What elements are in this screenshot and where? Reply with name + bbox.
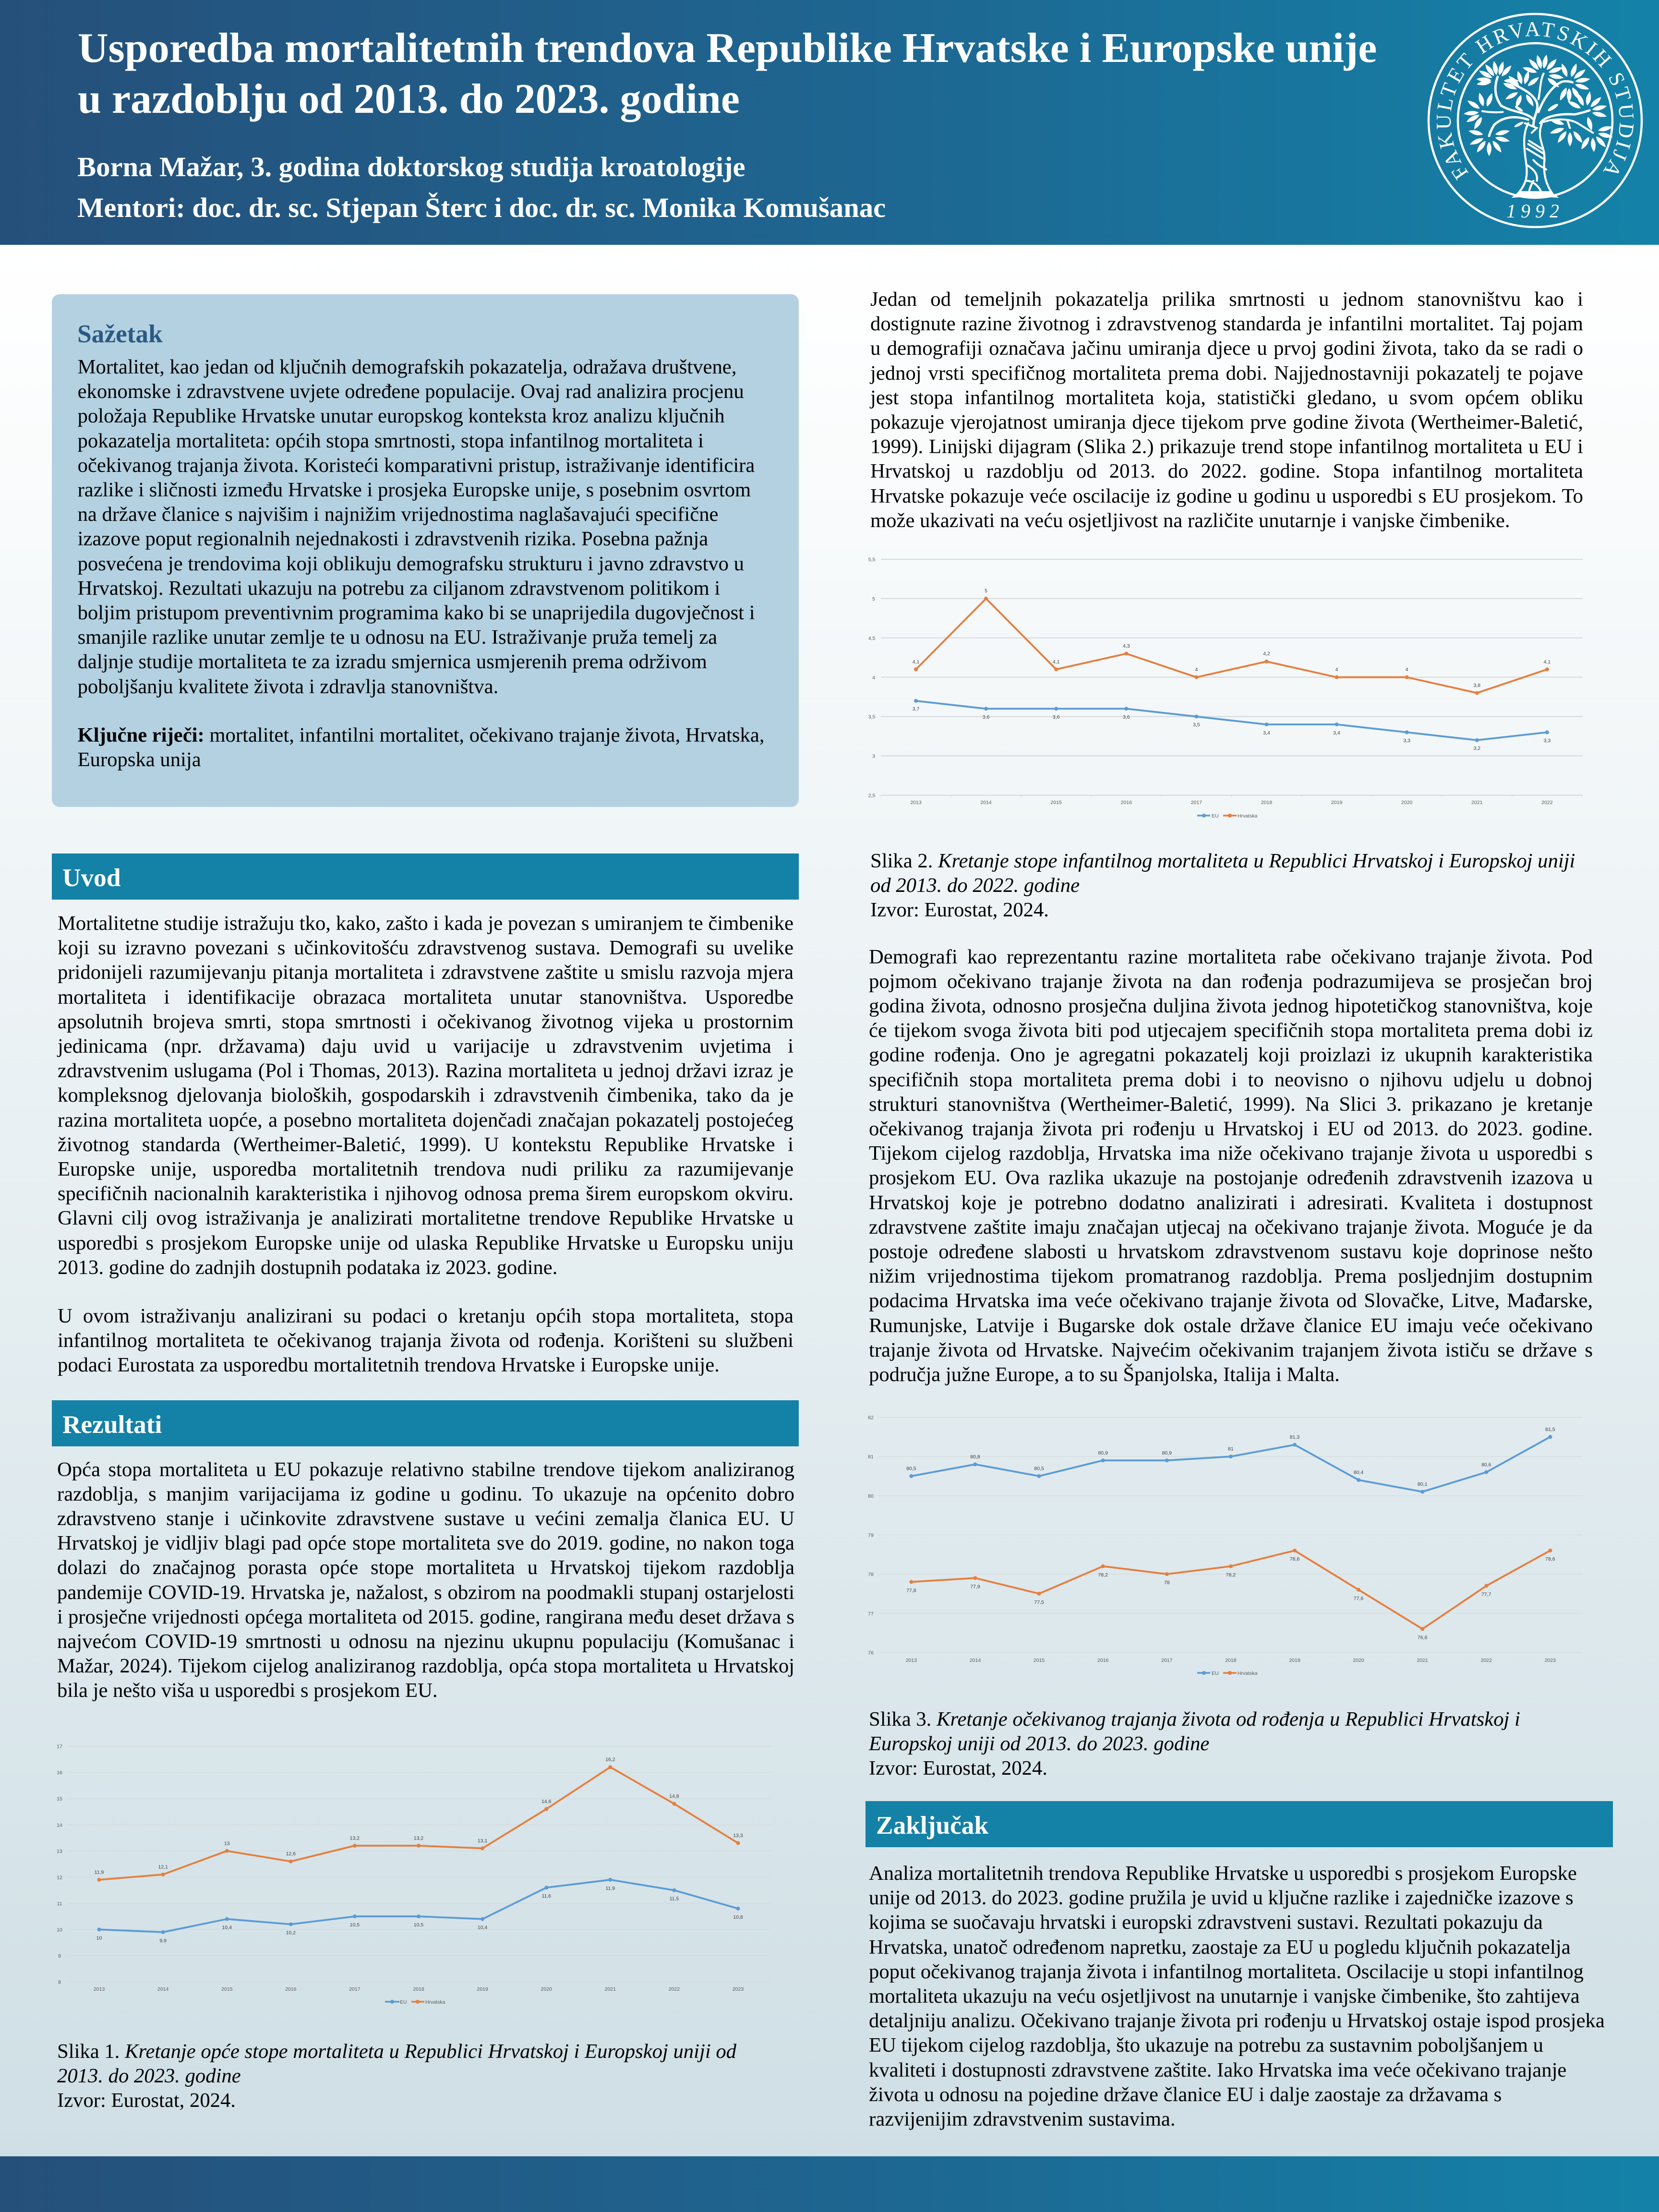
text: results: pandemije COVID-19. Hrvatska je, nažalost, s obzirom na poodmakli stupanj ostarjelosti xyxy=(57,1581,794,1604)
series: Hrvatska: 3,8 xyxy=(1473,683,1480,688)
series: EU: 3,4 xyxy=(1263,730,1270,736)
series: EU: 3,7 xyxy=(913,706,919,712)
series: Hrvatska: 78 xyxy=(1164,1580,1170,1586)
caption: Slika 1: Izvor: Eurostat, 2024. xyxy=(57,2089,236,2112)
series: Hrvatska: 76,6 xyxy=(1418,1635,1428,1640)
text: infant mortality: može ukazivati na veću osjetljivost na različite unutarnje i vanjske čimbenike. xyxy=(870,509,1510,532)
line chart: Slika 1, general mortality rate: 2016 xyxy=(285,1986,297,1992)
series: EU: 81 xyxy=(1228,1446,1234,1452)
line chart: Slika 1, general mortality rate xyxy=(57,1744,770,2005)
series: Hrvatska: 77,6 xyxy=(1354,1596,1363,1601)
line chart: Slika 1, general mortality rate: 15 xyxy=(57,1796,62,1802)
line chart: Slika 1, general mortality rate: 2022 xyxy=(669,1986,680,1992)
abstract text: izazove poput regionalnih nejednakosti i zdravstvenih rizika. Posebna pažnja xyxy=(78,528,708,550)
series: Hrvatska: 78,2 xyxy=(1098,1572,1108,1578)
author and mentors: Mentori: doc. dr. sc. Stjepan Šterc i doc. dr. sc. Monika Komušanac xyxy=(77,192,886,223)
series: EU: 80,5 xyxy=(1034,1466,1044,1472)
text: infant mortality: Jedan od temeljnih pokazatelja prilika smrtnosti u jednom stanovništvu kao i xyxy=(870,288,1583,311)
abstract text: smanjile razlike unutar zemlje te u odnosu na EU. Istraživanje pruža temelj za xyxy=(78,626,717,649)
series: EU: 3,3 xyxy=(1544,738,1551,744)
series: Hrvatska: 77,8 xyxy=(906,1587,916,1593)
legend: Hrvatska xyxy=(1238,1671,1258,1676)
text: life expectancy: pojmom očekivano trajanje života na dan rođenja podrazumijeva se prosječan broj xyxy=(869,970,1593,993)
text: results: i prosječne vrijednosti općega mortaliteta od 2015. godine, rangirana među deset država s xyxy=(57,1606,794,1628)
series: EU: 80,4 xyxy=(1354,1470,1363,1476)
text: introduction paragraph 1: 2013. godine do zadnjih dostupnih podataka iz 2023. godine. xyxy=(58,1256,557,1279)
legend xyxy=(385,1999,445,2005)
text: introduction paragraph 1: Glavni cilj ovog istraživanja je analizirati mortalitetne trendove Republike Hrvatske u xyxy=(58,1207,793,1229)
text: conclusion: Hrvatska, unatoč određenom napretku, zaostaje za EU u pogledu ključnih pokazatelja xyxy=(869,1936,1571,1959)
line chart: Slika 2, infant mortality rate: 2018 xyxy=(1261,800,1272,805)
text: life expectancy: očekivanog trajanja života pri rođenju u Hrvatskoj i EU od 2013. do 2023. godine. xyxy=(869,1118,1593,1140)
line chart: Slika 2, infant mortality rate: 2019 xyxy=(1331,800,1342,805)
series: Hrvatska: 4 xyxy=(1195,667,1198,673)
line chart: Slika 1, general mortality rate: 2020 xyxy=(541,1986,552,1992)
abstract text: poboljšanju kvalitete života i zdravlja stanovništva. xyxy=(78,675,498,698)
series: Hrvatska: 14,6 xyxy=(541,1799,552,1804)
line chart: Slika 2, infant mortality rate: 4 xyxy=(872,675,875,681)
caption: Slika 3: Slika 3. Kretanje očekivanog trajanja života od rođenja u Republici Hrvatskoj i xyxy=(869,1708,1520,1731)
line chart: Slika 3, life expectancy: 2016 xyxy=(1097,1658,1109,1663)
caption: Slika 1: Slika 1. Kretanje opće stope mortaliteta u Republici Hrvatskoj i Europskoj uniji od xyxy=(57,2040,736,2063)
series: Hrvatska: 77,9 xyxy=(970,1584,980,1589)
series: Hrvatska xyxy=(913,588,1551,695)
series: EU: 3,5 xyxy=(1193,722,1200,728)
text: life expectancy: prosjekom EU. Ova razlika ukazuje na postojanje određenih zdravstvenih izazova u xyxy=(869,1166,1593,1189)
text: infant mortality: Hrvatskoj u razdoblju od 2013. do 2022. godine. Stopa infantilnog mortaliteta xyxy=(870,460,1583,482)
series: Hrvatska: 4,1 xyxy=(1544,659,1551,665)
series: EU: 80,8 xyxy=(970,1454,980,1460)
series: EU: 80,9 xyxy=(1162,1450,1172,1456)
text: introduction paragraph 1: Mortalitetne studije istražuju tko, kako, zašto i kada je povezan s umiranjem te čimbenike xyxy=(58,912,793,935)
icon: faculty seal with olive tree: FAKULTET HRVATSKIH STUDIJA xyxy=(1437,22,1634,180)
text: conclusion: detaljniju analizu. Očekivano trajanje života pri rođenju u Hrvatskoj ostaje ispod prosjeka xyxy=(869,2009,1605,2032)
series: EU: 3,6 xyxy=(1123,714,1130,720)
legend: EU xyxy=(1212,1671,1219,1676)
series: EU: 9,9 xyxy=(159,1938,167,1944)
line chart: Slika 2, infant mortality rate: 2020 xyxy=(1401,800,1413,805)
text: conclusion: kojima se suočavaju hrvatski i europski zdravstveni sustavi. Rezultati pokazuju da xyxy=(869,1911,1543,1934)
title xyxy=(78,25,1377,122)
series: Hrvatska: 4,1 xyxy=(1053,659,1060,665)
text: introduction paragraph 1: specifičnih nacionalnih karakteristika i njihovog odnosa prema širem europskom okviru. xyxy=(58,1182,793,1205)
series: EU xyxy=(913,699,1551,751)
line chart: Slika 3, life expectancy: 2019 xyxy=(1289,1658,1300,1663)
line chart: Slika 2, infant mortality rate: 2014 xyxy=(980,800,992,805)
caption: Slika 2: Slika 2. Kretanje stope infantilnog mortaliteta u Republici Hrvatskoj i Europskoj uniji xyxy=(870,850,1575,872)
caption: Slika 2 xyxy=(870,850,1575,921)
text: conclusion: poput očekivanog trajanja života i infantilnog mortaliteta. Oscilacije u stopi infantilnog xyxy=(869,1960,1584,1983)
text: life expectancy: godina života, odnosno prosječna duljina života jednog hipotetičkog stanovništva, koje xyxy=(869,995,1593,1017)
keywords xyxy=(78,724,764,771)
legend: Hrvatska xyxy=(1238,813,1258,819)
abstract text: očekivanog trajanja života. Koristeći komparativni pristup, istraživanje identificira xyxy=(78,454,755,477)
text: life expectancy: specifičnih stopa mortaliteta prema dobi i to neovisno o njihovu udjelu u dobnoj xyxy=(869,1069,1593,1091)
series: Hrvatska: 12,1 xyxy=(158,1864,168,1870)
author and mentors: Borna Mažar, 3. godina doktorskog studija kroatologije xyxy=(77,151,745,182)
text: conclusion: unije od 2013. do 2023. godine pružila je uvid u ključne razlike i zajedničke izazove s xyxy=(869,1887,1574,1909)
legend: EU xyxy=(400,1999,407,2005)
text: life expectancy xyxy=(869,946,1593,1386)
text: introduction paragraph 2 xyxy=(58,1305,793,1376)
series: EU: 80,6 xyxy=(1481,1462,1491,1467)
series: EU: 10,8 xyxy=(733,1914,743,1920)
series: EU: 10,4 xyxy=(478,1925,487,1931)
heading band: Uvod xyxy=(52,854,799,900)
line chart: Slika 3, life expectancy: 2015 xyxy=(1034,1658,1045,1663)
text: introduction paragraph 1: apsolutnih brojeva smrti, stopa smrtnosti i očekivanog životnog vijeka u prostornim xyxy=(58,1010,793,1033)
text: life expectancy: postoje određene slabosti u hrvatskom zdravstvenom sustavu koje doprinose nešto xyxy=(869,1240,1593,1263)
text: life expectancy: trajanje života od Hrvatske. Najvećim očekivanim trajanjem života ističu se države s xyxy=(869,1339,1593,1361)
series: Hrvatska: 77,5 xyxy=(1034,1599,1044,1605)
series: EU xyxy=(906,1427,1555,1494)
line chart: Slika 1, general mortality rate: 2014 xyxy=(157,1986,168,1992)
text: life expectancy: će tijekom svoga života biti pod utjecajem specifičnih stopa mortaliteta prema dobi iz xyxy=(869,1019,1593,1042)
series: Hrvatska: 11,9 xyxy=(95,1869,104,1875)
text: infant mortality: dostignute razine životnog i zdravstvenog standarda je infantilni mortalitet. Taj pojam xyxy=(870,313,1583,335)
text: conclusion: mortaliteta ukazuju na veću osjetljivost na unutarnje i vanjske čimbenike, što zahtijeva xyxy=(869,1985,1580,2008)
abstract text xyxy=(78,356,755,698)
series: Hrvatska: 12,6 xyxy=(286,1851,296,1857)
line chart: Slika 1, general mortality rate: 2013 xyxy=(94,1986,105,1992)
caption: Slika 3: Europskoj uniji od 2013. do 2023. godine xyxy=(869,1732,1209,1755)
text: infant mortality: jednoj vrsti specifičnog mortaliteta prema dobi. Najjednostavniji pokazatelj te pojave xyxy=(870,362,1583,385)
text: introduction paragraph 2: U ovom istraživanju analizirani su podaci o kretanju općih stopa mortaliteta, stopa xyxy=(58,1305,793,1327)
series: Hrvatska: 4,2 xyxy=(1263,651,1270,657)
line chart: Slika 3, life expectancy: 81 xyxy=(868,1454,874,1460)
series: EU: 80,5 xyxy=(906,1466,916,1472)
text: introduction paragraph 1: pridonijeli razumijevanju pitanja mortaliteta i zdravstvene zaštite u smislu razvoja mjera xyxy=(58,961,793,984)
line chart: Slika 1, general mortality rate: 2017 xyxy=(349,1986,361,1992)
line chart: Slika 2, infant mortality rate: 2021 xyxy=(1471,800,1483,805)
series: Hrvatska xyxy=(95,1757,743,1882)
series: Hrvatska: 78,6 xyxy=(1545,1556,1555,1562)
series: EU: 11,5 xyxy=(670,1896,679,1902)
series: Hrvatska: 13,2 xyxy=(350,1835,360,1841)
line chart: Slika 2, infant mortality rate: 2016 xyxy=(1121,800,1132,805)
line chart: Slika 2, infant mortality rate xyxy=(868,557,1583,819)
line chart: Slika 2, infant mortality rate: 3 xyxy=(872,754,875,759)
text: conclusion: života u odnosu na pojedine države članice EU i dalje zaostaje za državama s xyxy=(869,2083,1502,2106)
series: Hrvatska: 78,2 xyxy=(1226,1572,1236,1578)
line chart: Slika 1, general mortality rate: 11 xyxy=(57,1901,62,1907)
line chart: Slika 3, life expectancy: 2022 xyxy=(1481,1658,1492,1663)
line chart: Slika 3, life expectancy: 2018 xyxy=(1225,1658,1237,1663)
line chart: Slika 3, life expectancy: 2014 xyxy=(970,1658,981,1663)
text: introduction paragraph 2: podaci Eurostata za usporedbu mortalitetnih trendova Hrvatske i Europske unije. xyxy=(58,1354,720,1376)
series: EU: 11,6 xyxy=(541,1893,551,1899)
line chart: Slika 3, life expectancy: 80 xyxy=(868,1493,874,1499)
abstract text: ekonomske i zdravstvene uvjete određene populacije. Ovaj rad analizira procjenu xyxy=(78,380,744,403)
series: Hrvatska: 4,3 xyxy=(1123,643,1130,649)
keywords: Ključne riječi: mortalitet, infantilni mortalitet, očekivano trajanje života, Hrvatska, xyxy=(78,724,764,746)
line chart: Slika 1, general mortality rate: 14 xyxy=(57,1822,62,1828)
line chart: Slika 3, life expectancy: 77 xyxy=(868,1611,874,1617)
text: introduction paragraph 1: mortaliteta i identifikacije obrazaca mortaliteta unutar stanovništva. Usporedbe xyxy=(58,986,793,1009)
series: Hrvatska: 5 xyxy=(985,588,987,594)
title: Usporedba mortalitetnih trendova Republike Hrvatske i Europske unije xyxy=(78,25,1377,72)
text: conclusion: razvijenijim zdravstvenim sustavima. xyxy=(869,2108,1175,2130)
heading band: Rezultati: Rezultati xyxy=(62,1410,162,1439)
series: Hrvatska: 13 xyxy=(224,1840,230,1846)
series: EU: 81,3 xyxy=(1290,1434,1299,1440)
text: results: razdoblja, s manjim varijacijama iz godine u godinu. To ukazuje na općenito dobro xyxy=(57,1483,794,1505)
series: EU: 10,5 xyxy=(350,1922,360,1928)
text: results: Mažar, 2024). Tijekom cijelog analiziranog razdoblja, opća stopa mortaliteta u Hrvatskoj xyxy=(57,1655,794,1677)
line chart: Slika 2, infant mortality rate: 5,5 xyxy=(868,557,875,563)
caption: Slika 1: 2013. do 2023. godine xyxy=(57,2065,241,2087)
text: introduction paragraph 1: usporedbi s prosjekom Europske unije od ulaska Republike Hrvatske u Europsku uniju xyxy=(58,1232,793,1254)
line chart: Slika 3, life expectancy: 2023 xyxy=(1545,1658,1556,1663)
series: EU: 10,5 xyxy=(414,1922,423,1928)
series: Hrvatska: 14,8 xyxy=(669,1793,679,1799)
series: EU: 3,4 xyxy=(1333,730,1340,736)
heading band: Zaključak: Zaključak xyxy=(876,1811,988,1839)
text: conclusion: Analiza mortalitetnih trendova Republike Hrvatske u usporedbi s prosjekom Europske xyxy=(869,1862,1577,1885)
legend xyxy=(1197,1671,1258,1676)
legend xyxy=(1197,813,1258,819)
series: Hrvatska: 13,1 xyxy=(478,1838,487,1844)
text: life expectancy: Demografi kao reprezentantu razine mortaliteta rabe očekivano trajanje života. Pod xyxy=(869,946,1593,968)
series: EU: 10,4 xyxy=(222,1925,232,1931)
heading band: Rezultati xyxy=(52,1400,799,1446)
text: introduction paragraph 1: Europske unije, usporedba mortalitetnih trendova nudi priliku za razumijevanje xyxy=(58,1158,793,1180)
title: u razdoblju od 2013. do 2023. godine xyxy=(78,76,740,122)
abstract text: položaja Republike Hrvatske unutar europskog konteksta kroz analizu ključnih xyxy=(78,405,725,427)
text: results xyxy=(57,1458,794,1702)
series: EU xyxy=(96,1878,743,1944)
line chart: Slika 1, general mortality rate: 17 xyxy=(57,1744,62,1750)
line chart: Slika 1, general mortality rate: 2019 xyxy=(477,1986,488,1992)
abstract text: na države članice s najvišim i najnižim vrijednostima naglašavajući specifične xyxy=(78,503,718,526)
line chart: Slika 3, life expectancy: 2017 xyxy=(1161,1658,1173,1663)
text: infant mortality: Hrvatske pokazuje veće oscilacije iz godine u godinu u usporedbi s EU prosjekom. To xyxy=(870,485,1583,507)
line chart: Slika 1, general mortality rate: 10 xyxy=(57,1927,62,1933)
abstract text: Mortalitet, kao jedan od ključnih demografskih pokazatelja, odražava društvene, xyxy=(78,356,736,378)
line chart: Slika 3, life expectancy: 79 xyxy=(868,1532,874,1538)
text: results: Hrvatskoj je vidljiv blagi pad opće stope mortaliteta sve do 2019. godine, no nakon toga xyxy=(57,1532,794,1554)
line chart: Slika 3, life expectancy: 78 xyxy=(868,1572,874,1577)
line chart: Slika 3, life expectancy: 82 xyxy=(868,1415,874,1421)
header band xyxy=(0,0,1659,245)
series: EU: 10,2 xyxy=(286,1930,296,1936)
line chart: Slika 1, general mortality rate: 8 xyxy=(58,1980,61,1985)
series: Hrvatska: 13,2 xyxy=(414,1835,423,1841)
line chart: Slika 1, general mortality rate: 9 xyxy=(58,1953,61,1959)
text: life expectancy: područja južne Europe, a to su Španjolska, Italija i Malta. xyxy=(869,1363,1340,1386)
text: results: bila je nešto viša u usporedbi s prosjekom EU. xyxy=(57,1679,438,1702)
line chart: Slika 1, general mortality rate: 13 xyxy=(57,1849,62,1854)
line chart: Slika 1, general mortality rate: 2023 xyxy=(733,1986,744,1992)
text: conclusion xyxy=(869,1861,1608,2131)
author and mentors xyxy=(77,151,886,223)
line chart: Slika 1, general mortality rate: 2021 xyxy=(605,1986,616,1992)
text: introduction paragraph 1: jedinicama (npr. državama) daju uvid u varijacije u zdravstvenim uvjetima i xyxy=(58,1035,793,1058)
text: life expectancy: nižim vrijednostima tijekom promatranog razdoblja. Prema posljednjim dostupnim xyxy=(869,1265,1593,1287)
text: life expectancy: strukturi stanovništva (Wertheimer-Baletić, 1999). Na Slici 3. prikazano je kretanje xyxy=(869,1093,1593,1116)
text: infant mortality: 1999). Linijski dijagram (Slika 2.) prikazuje trend stope infantilnog mortaliteta u EU i xyxy=(870,435,1583,458)
text: life expectancy: Hrvatskoj koje je potrebno dodatno analizirati i adresirati. Kvaliteta i dostupnost xyxy=(869,1191,1593,1214)
text: conclusion: kvaliteti i dostupnosti zdravstvene zaštite. Iako Hrvatska ima veće očekivano trajanje xyxy=(869,2059,1566,2081)
heading band: Zaključak xyxy=(866,1801,1613,1847)
series: Hrvatska: 4,1 xyxy=(913,659,919,665)
legend: EU xyxy=(1212,813,1219,819)
keywords: Europska unija xyxy=(78,748,201,771)
caption: Slika 3 xyxy=(869,1707,1599,1781)
text: introduction paragraph 2: infantilnog mortaliteta te očekivanog trajanja života od rođenja. Korišteni su službeni xyxy=(58,1329,793,1352)
caption: Slika 1 xyxy=(57,2040,736,2112)
series: Hrvatska: 78,6 xyxy=(1290,1556,1299,1562)
text: life expectancy: Tijekom cijelog razdoblja, Hrvatska ima niže očekivano trajanje života u usporedbi s xyxy=(869,1142,1593,1165)
text: life expectancy: zdravstvene zaštite imaju značajan utjecaj na očekivano trajanje života. Moguće je da xyxy=(869,1216,1593,1238)
series: EU: 3,3 xyxy=(1403,738,1410,744)
abstract text: posvećena je trendovima koji oblikuju demografsku strukturu i javno zdravstvo u xyxy=(78,553,744,575)
abstract text: daljnje studije mortaliteta te za izradu smjernica usmjerenih prema održivom xyxy=(78,650,707,673)
series: EU: 3,6 xyxy=(983,714,990,720)
panel: abstract xyxy=(52,294,799,807)
text: results: Opća stopa mortaliteta u EU pokazuje relativno stabilne trendove tijekom analiziranog xyxy=(57,1458,794,1480)
text: infant mortality: jest stopa infantilnog mortaliteta koja, statistički gledano, u svom općem obliku xyxy=(870,386,1583,409)
line chart: Slika 2, infant mortality rate: 5 xyxy=(872,596,875,602)
heading: Sažetak: Sažetak xyxy=(77,319,163,348)
series: EU: 11,9 xyxy=(605,1886,615,1891)
series: EU: 80,1 xyxy=(1418,1481,1428,1487)
abstract text: boljim pristupom preventivnim programima kako bi se unaprijedila dugovječnost i xyxy=(78,601,755,624)
abstract text: Hrvatskoj. Rezultati ukazuju na potrebu za ciljanom zdravstvenom politikom i xyxy=(78,577,720,600)
series: Hrvatska: 13,3 xyxy=(733,1833,743,1839)
line chart: Slika 3, life expectancy: 76 xyxy=(868,1650,874,1656)
text: life expectancy: godine rođenja. Ono je agregatni pokazatelj koji proizlazi iz ukupnih karakteristika xyxy=(869,1044,1593,1066)
series: EU: 3,2 xyxy=(1473,745,1480,751)
series: Hrvatska: 77,7 xyxy=(1481,1592,1491,1598)
text: infant mortality: pokazuje vjerojatnost umiranja djece tijekom prve godine života (Wertheimer-Baletić, xyxy=(870,411,1583,433)
series: EU: 10 xyxy=(96,1936,102,1941)
series: EU: 80,9 xyxy=(1098,1450,1108,1456)
caption: Slika 3: Izvor: Eurostat, 2024. xyxy=(869,1757,1047,1779)
line chart: Slika 2, infant mortality rate: 2013 xyxy=(910,800,922,805)
line chart: Slika 3, life expectancy xyxy=(859,1407,1594,1683)
line chart: Slika 2, infant mortality rate: 3,5 xyxy=(868,714,875,720)
line chart: Slika 3, life expectancy: 2021 xyxy=(1417,1658,1428,1663)
line chart: Slika 2, infant mortality rate: 2017 xyxy=(1191,800,1202,805)
abstract text: pokazatelja mortaliteta: općih stopa smrtnosti, stopa infantilnog mortaliteta i xyxy=(78,430,704,452)
series: Hrvatska xyxy=(906,1549,1555,1640)
text: introduction paragraph 1: razina mortaliteta uopće, a posebno mortaliteta dojenčadi značajan pokazatelj postojećeg xyxy=(58,1109,793,1131)
line chart: Slika 2, infant mortality rate: 2015 xyxy=(1051,800,1062,805)
heading band: Uvod: Uvod xyxy=(62,863,121,892)
text: life expectancy: Rumunjske, Latvije i Bugarske dok ostale države članice EU imaju veće očekivano xyxy=(869,1314,1593,1337)
text: introduction paragraph 1: kompleksnog djelovanja bioloških, gospodarskih i zdravstvenih čimbenika, tako da je xyxy=(58,1084,793,1106)
abstract text: razlike i sličnosti između Hrvatske i prosjeka Europske unije, s posebnim osvrtom xyxy=(78,479,751,501)
series: EU: 3,6 xyxy=(1053,714,1060,720)
line chart: Slika 2, infant mortality rate: 2,5 xyxy=(868,793,875,799)
series: EU: 81,5 xyxy=(1545,1427,1555,1432)
text: infant mortality: u demografiji označava jačinu umiranja djece u prvoj godini života, tako da se radi o xyxy=(870,337,1583,360)
text: results: najvećom COVID-19 smrtnosti u odnosu na njezinu ukupnu populaciju (Komušanac i xyxy=(57,1630,794,1653)
text: life expectancy: podacima Hrvatska ima veće očekivano trajanje života od Slovačke, Litve, Mađarske, xyxy=(869,1289,1593,1312)
text: conclusion: EU tijekom cijelog razdoblja, što ukazuje na potrebu za sustavnim poboljšanjem u xyxy=(869,2034,1543,2056)
series: Hrvatska: 4 xyxy=(1406,667,1408,673)
series: Hrvatska: 16,2 xyxy=(605,1757,615,1763)
text: introduction paragraph 1: zdravstvenim uslugama (Pol i Thomas, 2013). Razina mortaliteta u jednoj državi izraz je xyxy=(58,1059,793,1082)
line chart: Slika 1, general mortality rate: 2015 xyxy=(221,1986,233,1992)
line chart: Slika 1, general mortality rate: 16 xyxy=(57,1770,62,1776)
text: introduction paragraph 1: koji su izravno povezani s učinkovitošću zdravstvenog sustava. Demografi su uvelike xyxy=(58,937,793,959)
caption: Slika 2: Izvor: Eurostat, 2024. xyxy=(870,899,1049,921)
line chart: Slika 3, life expectancy: 2020 xyxy=(1353,1658,1364,1663)
text: results: dolazi do značajnog porasta opće stope mortaliteta u Hrvatskoj tijekom razdoblja xyxy=(57,1556,794,1579)
legend: Hrvatska xyxy=(425,1999,445,2005)
text: introduction paragraph 1 xyxy=(57,912,793,1279)
text: infant mortality xyxy=(870,288,1583,532)
line chart: Slika 3, life expectancy: 2013 xyxy=(906,1658,917,1663)
line chart: Slika 1, general mortality rate: 2018 xyxy=(413,1986,424,1992)
text: results: zdravstveno stanje i učinkovite zdravstvene sustave u većini zemalja članica EU. U xyxy=(57,1507,794,1530)
line chart: Slika 2, infant mortality rate: 2022 xyxy=(1541,800,1553,805)
text: introduction paragraph 1: životnog standarda (Wertheimer-Baletić, 1999). U kontekstu Republike Hrvatske i xyxy=(58,1133,793,1156)
icon: faculty seal with olive tree: 1992 xyxy=(1506,200,1564,222)
line chart: Slika 2, infant mortality rate: 4,5 xyxy=(868,636,875,641)
footer band xyxy=(0,2156,1659,2212)
series: Hrvatska: 4 xyxy=(1335,667,1338,673)
caption: Slika 2: od 2013. do 2022. godine xyxy=(870,874,1080,897)
line chart: Slika 1, general mortality rate: 12 xyxy=(57,1875,62,1880)
